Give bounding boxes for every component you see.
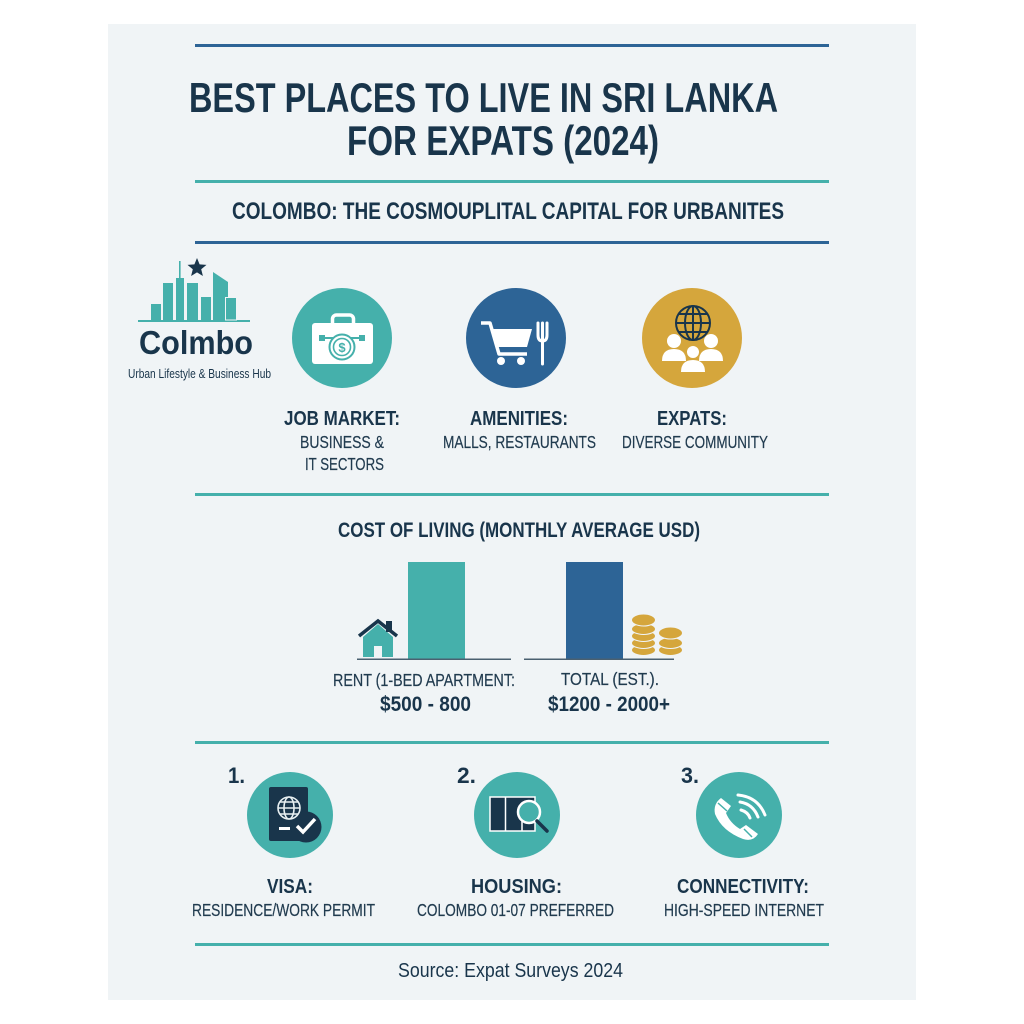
label: HOUSING: xyxy=(471,875,562,898)
label: EXPATS: xyxy=(657,407,727,430)
label: CONNECTIVITY: xyxy=(677,875,809,898)
feature: amenities: MALLS, RESTAURANTS xyxy=(443,432,596,452)
bar: rent: $500 - 800 xyxy=(380,693,471,716)
bar chart: cost of living xyxy=(333,562,682,716)
number: 2. xyxy=(457,763,476,788)
icon: globe and people xyxy=(642,288,742,388)
icon: phone with signal xyxy=(696,772,782,858)
icon: house xyxy=(359,621,397,657)
feature: expats xyxy=(622,288,768,452)
title xyxy=(189,74,778,164)
icon: cart and fork xyxy=(466,288,566,388)
source note: Source: Expat Surveys 2024 xyxy=(398,959,623,982)
label: JOB MARKET: xyxy=(284,407,400,430)
bar: total: $1200 - 2000+ xyxy=(548,693,670,716)
panel: background card xyxy=(108,24,916,1000)
feature: job market: BUSINESS & xyxy=(300,432,384,452)
label: VISA: xyxy=(267,875,313,898)
step 1: visa: RESIDENCE/WORK PERMIT xyxy=(192,900,375,920)
icon: coin stacks xyxy=(632,614,682,656)
bar: rent: RENT (1-BED APARTMENT: xyxy=(333,670,515,690)
feature: job market: IT SECTORS xyxy=(305,454,384,474)
feature: job market xyxy=(284,288,400,474)
heading: cost of living: COST OF LIVING (MONTHLY AVERAGE USD) xyxy=(338,519,700,542)
title: BEST PLACES TO LIVE IN SRI LANKA xyxy=(189,74,778,121)
step 1: visa xyxy=(192,763,375,920)
bar: rent xyxy=(333,562,515,716)
icon: map with magnifier xyxy=(474,772,560,858)
logo tagline: Urban Lifestyle & Business Hub xyxy=(128,366,271,381)
step 3: connectivity xyxy=(664,763,824,920)
number: 3. xyxy=(681,763,699,788)
step 3: connectivity: HIGH-SPEED INTERNET xyxy=(664,900,824,920)
logo: Colombo skyline xyxy=(128,258,271,381)
label: AMENITIES: xyxy=(470,407,568,430)
feature: expats: DIVERSE COMMUNITY xyxy=(622,432,768,452)
icon: star xyxy=(188,258,206,276)
title: FOR EXPATS (2024) xyxy=(347,117,659,164)
subtitle: COLOMBO: THE COSMOUPLITAL CAPITAL FOR URBANITES xyxy=(232,198,784,225)
step 2: housing xyxy=(417,763,614,920)
feature: amenities xyxy=(443,288,596,452)
step 2: housing: COLOMBO 01-07 PREFERRED xyxy=(417,900,614,920)
bar: total xyxy=(524,562,682,716)
bar: total: TOTAL (EST.). xyxy=(561,669,659,689)
icon: passport xyxy=(247,772,333,858)
number: 1. xyxy=(228,763,245,788)
logo name: Colmbo xyxy=(139,324,253,361)
icon: briefcase: $ xyxy=(338,340,346,355)
icon: briefcase xyxy=(292,288,392,388)
icon: skyline xyxy=(138,261,250,322)
